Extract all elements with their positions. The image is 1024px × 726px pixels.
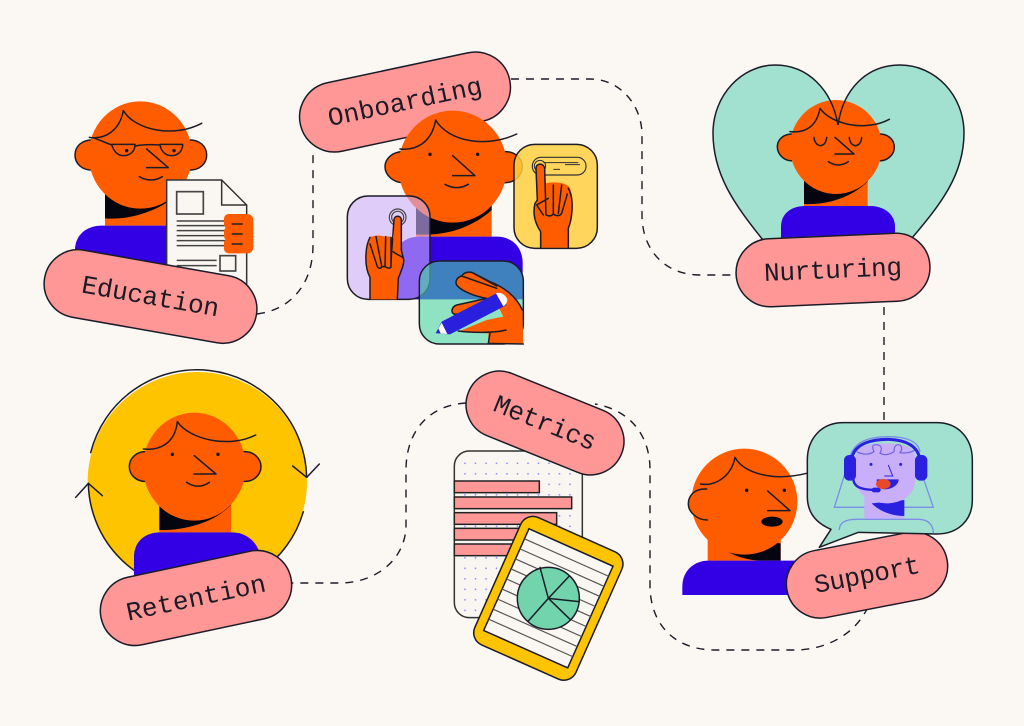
label: metrics: Metrics	[489, 390, 600, 458]
speech bubble with agent	[807, 423, 972, 547]
label: education: Education	[79, 271, 221, 324]
icon: headset	[844, 439, 927, 492]
label: onboarding: Onboarding	[325, 72, 485, 134]
onboarding figure with touch gestures	[347, 111, 597, 344]
panel: support	[682, 423, 972, 624]
icon: hand holding document	[224, 214, 253, 253]
education figure with document	[75, 101, 253, 293]
tablet	[469, 512, 627, 684]
panel: retention	[76, 370, 319, 652]
panel: yellow swipe gesture	[514, 144, 597, 248]
connector: support to metrics	[595, 404, 868, 650]
report with bars, and tablet with pie chart	[454, 451, 627, 684]
agent head	[856, 443, 915, 519]
label: onboarding	[293, 46, 517, 158]
nurturing figure	[777, 100, 895, 240]
connector: education to onboarding	[257, 150, 313, 314]
pie chart	[517, 567, 579, 629]
panel: onboarding	[293, 46, 597, 344]
label: nurturing	[735, 232, 931, 308]
report sheet with dots	[454, 451, 582, 618]
panel: nurturing	[713, 65, 964, 308]
panel: education	[39, 101, 262, 349]
label: nurturing: Nurturing	[763, 253, 903, 289]
label: support	[781, 526, 953, 624]
heart shape	[713, 65, 964, 240]
label: support: Support	[812, 551, 923, 601]
bar chart	[454, 481, 572, 556]
connector: nurturing to support	[883, 307, 885, 423]
label: metrics	[456, 361, 634, 485]
label: education	[39, 244, 262, 349]
panel: purple tap gesture	[347, 196, 430, 299]
document	[167, 180, 247, 293]
agent cape and shoulders	[834, 437, 933, 533]
label: retention	[94, 544, 298, 652]
label: retention: Retention	[124, 570, 269, 628]
connector: metrics to retention	[291, 403, 466, 583]
support customer figure	[682, 449, 807, 595]
panel: metrics	[454, 361, 634, 684]
panel: green writing gesture	[419, 261, 523, 344]
connector: onboarding to nurturing	[511, 79, 736, 275]
retention figure with cycle circle	[76, 370, 319, 591]
heart outline	[713, 65, 964, 240]
